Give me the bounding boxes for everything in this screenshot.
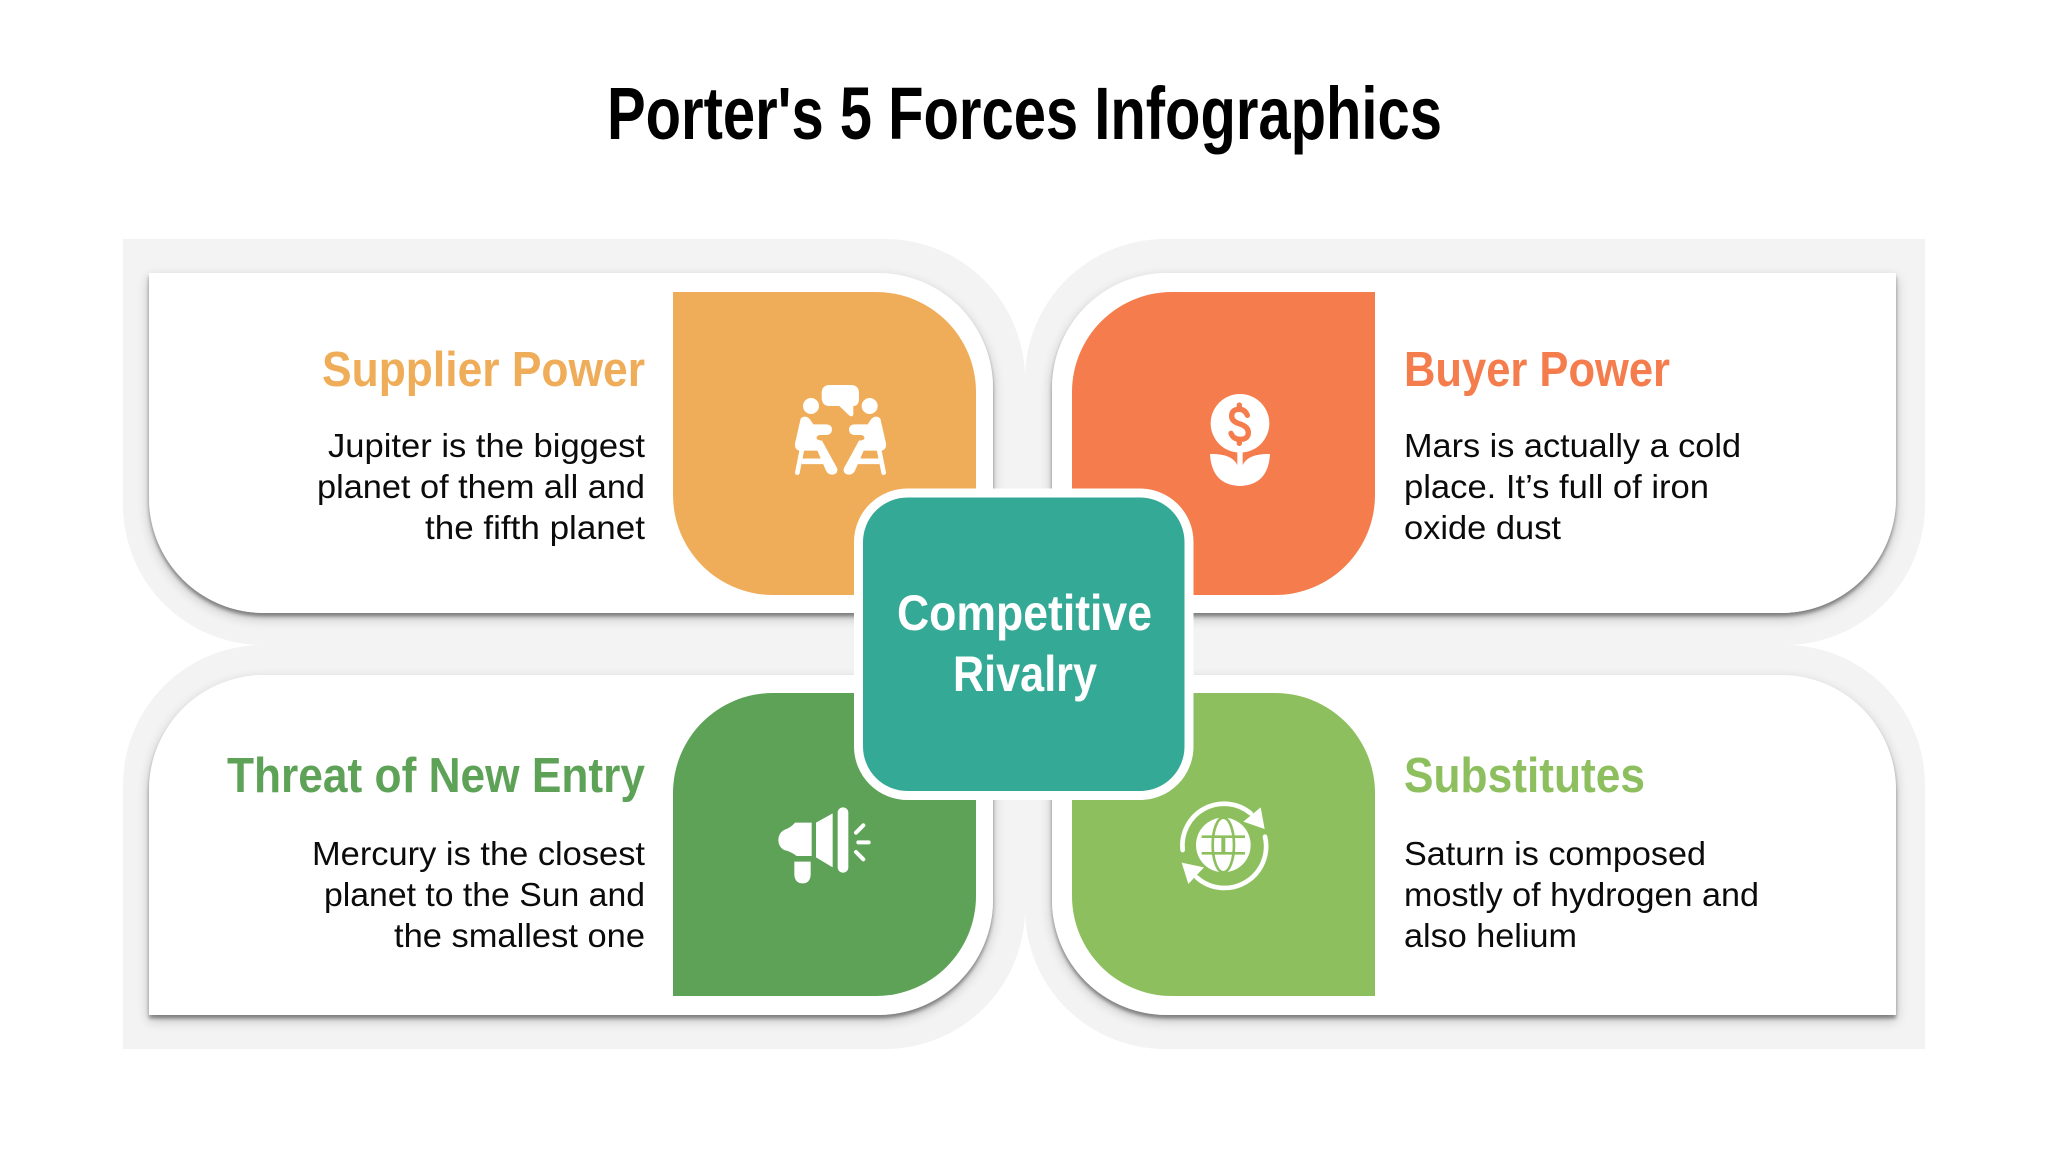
icon: globe with arrows: [1182, 804, 1266, 888]
centre label: Competitive: [897, 585, 1152, 641]
panel: Threat of New Entry: [149, 675, 993, 1015]
text: Supplier Power description: the fifth planet: [425, 509, 645, 546]
text: Substitutes description: also helium: [1404, 917, 1577, 954]
text: Buyer Power description: [1404, 427, 1741, 546]
card: Threat of New Entry: [149, 675, 993, 1015]
colour block: Supplier Power: [673, 292, 976, 595]
text: Threat of New Entry description: [312, 835, 645, 954]
icon: megaphone: [778, 807, 869, 883]
text: Buyer Power description: Mars is actually a cold: [1404, 427, 1741, 464]
colour block: Buyer Power: [1072, 292, 1375, 595]
heading: Buyer Power: Buyer Power: [1404, 343, 1670, 397]
text: Supplier Power description: Jupiter is the biggest: [328, 427, 645, 464]
colour block: Substitutes: [1072, 693, 1375, 996]
text: Threat of New Entry description: Mercury is the closest: [312, 835, 645, 872]
panel: Substitutes: [1052, 675, 1896, 1015]
heading: Threat of New Entry: Threat of New Entry: [227, 749, 645, 803]
text: Supplier Power description: [317, 427, 645, 546]
centre box: Competitive Rivalry: [858, 493, 1189, 796]
colour block: Threat of New Entry: [673, 693, 976, 996]
icon: two people talking: [795, 385, 886, 475]
background panel: grey petals: [123, 239, 1925, 1049]
panel: Supplier Power: [149, 273, 993, 613]
text: Substitutes description: Saturn is composed: [1404, 835, 1706, 872]
text: Supplier Power description: planet of them all and: [317, 468, 645, 505]
text: Substitutes description: mostly of hydrogen and: [1404, 876, 1759, 913]
icon: money plant: [1210, 394, 1270, 486]
text: Buyer Power description: oxide dust: [1404, 509, 1561, 546]
title: Porter's 5 Forces Infographics: [607, 72, 1442, 155]
card: Substitutes: [1052, 675, 1896, 1015]
heading: Substitutes: Substitutes: [1404, 749, 1645, 803]
panel: Buyer Power: [1052, 273, 1896, 613]
text: Threat of New Entry description: planet to the Sun and: [324, 876, 645, 913]
centre label: Rivalry: [953, 646, 1097, 702]
centre label: [897, 585, 1152, 702]
text: Substitutes description: [1404, 835, 1759, 954]
heading: Supplier Power: Supplier Power: [322, 343, 645, 397]
card: Supplier Power: [149, 273, 993, 613]
card: Buyer Power: [1052, 273, 1896, 613]
text: Buyer Power description: place. It’s full of iron: [1404, 468, 1709, 505]
text: Threat of New Entry description: the smallest one: [394, 917, 645, 954]
